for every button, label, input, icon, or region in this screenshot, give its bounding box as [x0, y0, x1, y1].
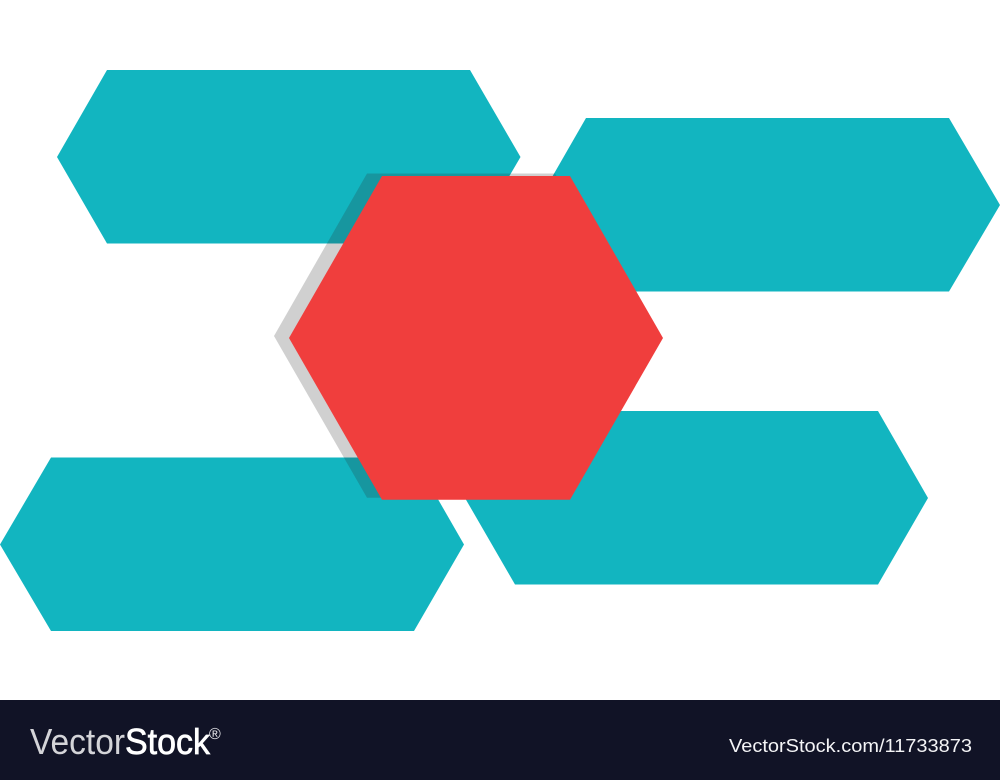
- footer image id text: VectorStock.com/11733873: [729, 736, 972, 756]
- panel: top-left teal elongated hexagon: [57, 70, 520, 244]
- panel: bottom-right teal elongated hexagon: [465, 411, 928, 584]
- footer logo: VectorStock: Stock: [125, 721, 211, 762]
- footer logo: VectorStock: [30, 721, 221, 762]
- footer bar: [0, 700, 1000, 780]
- shadow of central hexagon: [274, 174, 648, 498]
- panel: bottom-left teal elongated hexagon: [0, 458, 464, 631]
- footer logo: VectorStock: ®: [209, 726, 221, 743]
- footer logo: VectorStock: Vector: [30, 721, 125, 762]
- panel: top-right teal elongated hexagon: [536, 118, 1000, 292]
- panel: central red hexagon: [289, 176, 663, 500]
